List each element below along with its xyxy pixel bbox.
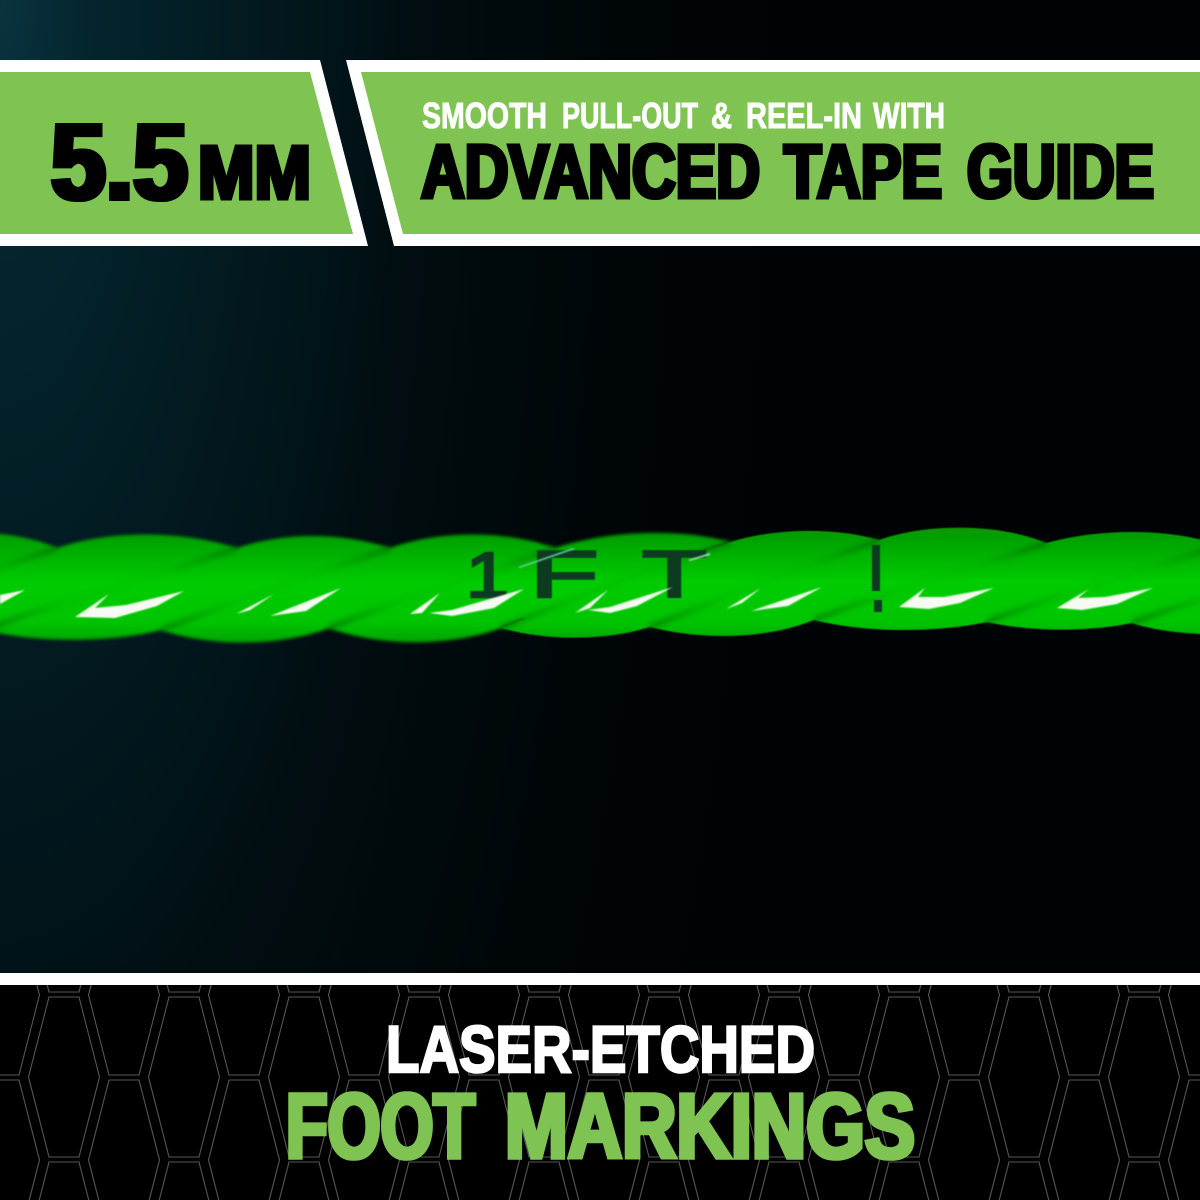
panel: green twisted trimmer line with foot marking	[0, 528, 1200, 643]
laser-etched marking: 1FT	[466, 537, 707, 611]
footer line: laser-etched: LASER-ETCHED	[386, 1012, 815, 1086]
foot tick mark	[872, 545, 882, 612]
subheading: smooth pull-out and reel-in: &	[711, 95, 732, 136]
subheading: smooth pull-out and reel-in	[422, 95, 945, 136]
spec value: 5.5mm	[51, 102, 311, 224]
laser-etched marking: 1FT: T	[642, 537, 707, 611]
panel: 5.5mm spec banner	[0, 60, 368, 246]
panel: advanced tape guide banner	[346, 60, 1200, 246]
subheading: smooth pull-out and reel-in: PULL-OUT	[562, 95, 698, 136]
spec value: 5.5mm: MM	[198, 130, 311, 216]
subheading: smooth pull-out and reel-in: WITH	[873, 95, 945, 136]
footer heading: foot markings	[286, 1074, 915, 1178]
heading: advanced tape guide: ADVANCED	[421, 129, 760, 215]
laser-etched marking: 1FT: 1	[466, 539, 509, 611]
footer heading: foot markings: MARKINGS	[505, 1074, 915, 1178]
spec value: 5.5mm: 5.5	[51, 102, 188, 224]
footer panel: black with hexagon pattern	[0, 973, 1200, 1200]
glossy highlights on the rope	[0, 548, 1153, 618]
subheading: smooth pull-out and reel-in: SMOOTH	[422, 95, 547, 136]
heading: advanced tape guide	[421, 129, 1154, 215]
subheading: smooth pull-out and reel-in: REEL-IN	[746, 95, 862, 136]
footer heading: foot markings: FOOT	[286, 1074, 475, 1178]
laser-etched marking: 1FT: F	[530, 537, 599, 611]
heading: advanced tape guide: TAPE	[784, 129, 942, 215]
